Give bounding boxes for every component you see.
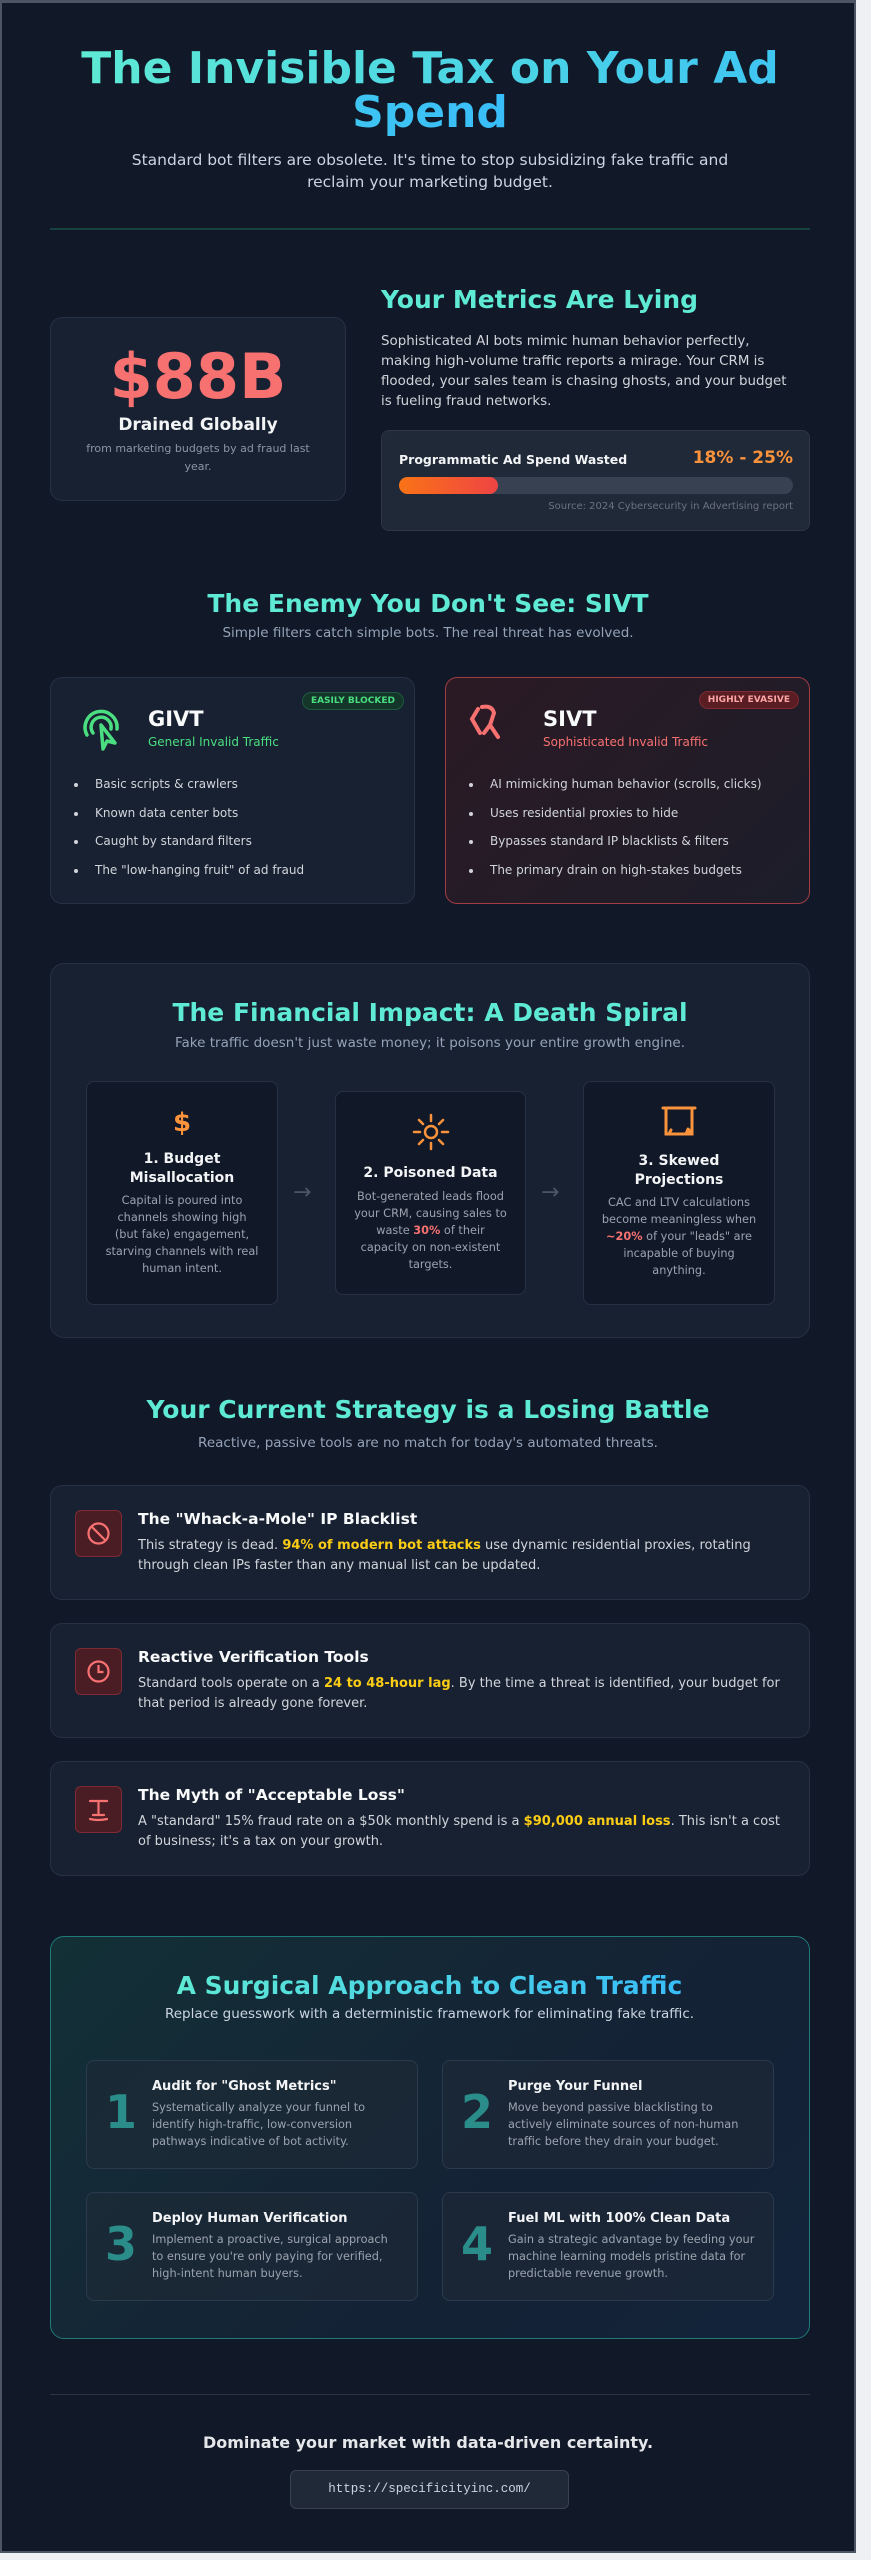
step 3: Implement a proactive, surgical approach to ensure you're only paying for verified, high-intent human buyers. (152, 2233, 388, 2280)
badge: highly evasive (699, 691, 799, 709)
progress box (381, 430, 810, 531)
footer url (290, 2470, 569, 2509)
card: budget misallocation: Capital is poured into channels showing high (but fake) engagement, starving channels with real human intent. (106, 1194, 258, 1275)
panel: GIVT: General Invalid Traffic (148, 735, 279, 749)
progress box: Source: 2024 Cybersecurity in Advertising report (548, 501, 793, 512)
SIVT title: SIVT (543, 707, 597, 731)
icon: sun burst (412, 1114, 450, 1150)
progress box: 18% - 25% (693, 448, 793, 468)
footer tagline: Dominate your market with data-driven certainty. (203, 2433, 653, 2452)
card: IP blacklist: This strategy is dead. 94% of modern bot attacks use dynamic residential proxies, rotating through clean IPs faster than any manual list can be updated. (138, 1538, 751, 1573)
card: reactive tools: Reactive Verification Tools (138, 1648, 369, 1666)
title: The Invisible Tax on Your Ad Spend (81, 43, 779, 138)
panel: GIVT (50, 677, 415, 904)
footer url: https://specificityinc.com/ (328, 2482, 531, 2496)
list: SIVT: Bypasses standard IP blacklists & filters (490, 834, 729, 848)
card: poisoned data (335, 1091, 526, 1295)
list: GIVT: Basic scripts & crawlers (95, 777, 238, 791)
step 4: Fuel ML with 100% Clean Data (508, 2211, 730, 2226)
subtitle: Standard bot filters are obsolete. It's time to stop subsidizing fake traffic and reclaim your marketing budget. (132, 151, 728, 191)
stat card: $88B: from marketing budgets by ad fraud last year. (86, 442, 310, 473)
subtitle: enemy: Simple filters catch simple bots. The real threat has evolved. (222, 625, 634, 641)
step 2: Move beyond passive blacklisting to actively eliminate sources of non-human traffic before they drain your budget. (508, 2101, 738, 2148)
card: acceptable loss: The Myth of "Acceptable Loss" (138, 1786, 405, 1804)
text: Reactive, passive tools are no match for today's automated threats. (198, 1435, 658, 1451)
progress box: Programmatic Ad Spend Wasted (399, 452, 627, 467)
icon: evasive figure (470, 704, 500, 740)
card: skewed projections: 3. Skewed Projections (635, 1153, 723, 1188)
card: acceptable loss: A "standard" 15% fraud rate on a $50k monthly spend is a $90,000 annual loss. This isn't a cost of business; it's a tax on your growth. (138, 1814, 780, 1849)
card: reactive tools: Standard tools operate on a 24 to 48-hour lag. By the time a threat is identified, your budget for that period is already gone forever. (138, 1676, 780, 1711)
card: budget misallocation (86, 1081, 278, 1305)
list: GIVT: Known data center bots (95, 806, 238, 820)
heading: metrics: Your Metrics Are Lying (381, 285, 698, 314)
card: skewed projections: CAC and LTV calculations become meaningless when ~20% of your "leads" are incapable of buying anything. (602, 1196, 756, 1277)
panel: financial impact: Fake traffic doesn't just waste money; it poisons your entire growth engine. (175, 1035, 685, 1051)
step 3 (86, 2192, 418, 2301)
list: GIVT (74, 777, 304, 876)
heading: enemy: The Enemy You Don't See: SIVT (207, 589, 649, 618)
heading: strategy: Your Current Strategy is a Losing Battle (146, 1395, 710, 1424)
step 4 (442, 2192, 774, 2301)
step 2 (442, 2060, 774, 2169)
step 2: Purge Your Funnel (508, 2079, 642, 2094)
stat card: $88B (50, 317, 346, 501)
icon: clock (75, 1648, 122, 1695)
list: SIVT: The primary drain on high-stakes budgets (490, 862, 742, 876)
panel: financial impact (50, 963, 810, 1338)
card: skewed projections (583, 1081, 775, 1305)
step 4: Gain a strategic advantage by feeding your machine learning models pristine data for predictable revenue growth. (508, 2233, 754, 2280)
badge: easily blocked: EASILY BLOCKED (311, 696, 395, 706)
step 1 (86, 2060, 418, 2169)
panel: surgical approach: Replace guesswork with a deterministic framework for eliminating fake traffic. (165, 2006, 694, 2022)
card: IP blacklist (50, 1485, 810, 1600)
icon: chart frame (662, 1106, 696, 1136)
arrow: → (541, 1180, 559, 1205)
list: GIVT: Caught by standard filters (95, 834, 252, 848)
paragraph: metrics: Sophisticated AI bots mimic human behavior perfectly, making high-volume traffic reports a mirage. Your CRM is flooded, your sales team is chasing ghosts, and your budget is fueling fraud networks. (381, 334, 786, 409)
stat card: $88B: Drained Globally (118, 415, 278, 435)
step 3: Deploy Human Verification (152, 2211, 348, 2226)
icon: cursor signal (83, 710, 119, 751)
step 3: 3 (105, 2217, 137, 2271)
step 4: 4 (461, 2217, 493, 2271)
step 1: Systematically analyze your funnel to identify high-traffic, low-conversion pathways indicative of bot activity. (152, 2101, 365, 2148)
list: SIVT (469, 777, 762, 876)
badge: easily blocked (302, 692, 404, 710)
badge: highly evasive: HIGHLY EVASIVE (708, 695, 790, 705)
card: poisoned data: 2. Poisoned Data (363, 1165, 498, 1181)
icon: scale (75, 1786, 122, 1833)
card: acceptable loss (50, 1761, 810, 1876)
icon: dollar: $ (173, 1108, 191, 1138)
card: reactive tools (50, 1623, 810, 1738)
panel: SIVT: Sophisticated Invalid Traffic (543, 735, 708, 749)
panel: SIVT (445, 677, 810, 904)
step 1: Audit for "Ghost Metrics" (152, 2079, 337, 2094)
list: GIVT: The "low-hanging fruit" of ad fraud (95, 862, 304, 876)
list: SIVT: AI mimicking human behavior (scrolls, clicks) (490, 777, 762, 791)
step 2: 2 (461, 2085, 493, 2139)
card: budget misallocation: 1. Budget Misallocation (130, 1151, 234, 1186)
panel: surgical approach (50, 1936, 810, 2339)
heading: surgical: A Surgical Approach to Clean Traffic (177, 1971, 682, 2000)
list: SIVT: Uses residential proxies to hide (490, 806, 678, 820)
heading: financial: The Financial Impact: A Death Spiral (172, 998, 688, 1027)
step 1: 1 (105, 2085, 137, 2139)
icon: no sign (75, 1510, 122, 1557)
stat card: $88B: $88B (110, 340, 286, 413)
card: IP blacklist: The "Whack-a-Mole" IP Blacklist (138, 1510, 417, 1528)
GIVT title: GIVT (148, 707, 204, 731)
card: poisoned data: Bot-generated leads flood your CRM, causing sales to waste 30% of their capacity on non-existent targets. (354, 1190, 507, 1271)
arrow: → (293, 1180, 311, 1205)
